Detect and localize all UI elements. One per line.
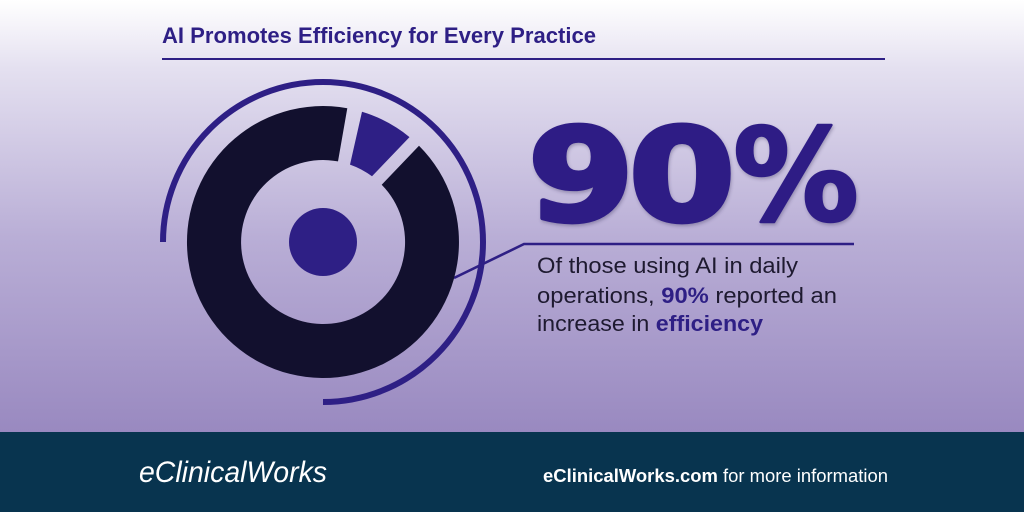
- big 90% figure: [528, 102, 859, 251]
- donut chart: [163, 82, 483, 402]
- big 90% figure: 9: [528, 102, 634, 251]
- leader line: [454, 244, 854, 278]
- big 90% figure: %: [733, 102, 859, 251]
- description text: [537, 253, 837, 336]
- footer link text: eClinicalWorks.com for more information: [543, 465, 888, 486]
- title underline: [162, 58, 885, 60]
- outer arc: [163, 82, 483, 402]
- title: AI Promotes Efficiency for Every Practice: [162, 23, 596, 48]
- logo wordmark: eClinicalWorks: [139, 456, 327, 489]
- description text: Of those using AI in daily: [537, 253, 798, 278]
- footer band: [0, 432, 1024, 512]
- description text: increase in efficiency: [537, 311, 764, 336]
- dark ring segment 90%: [187, 106, 459, 378]
- centre dot: [289, 208, 357, 276]
- description text: operations, 90% reported an: [537, 283, 837, 308]
- big 90% figure: 0: [629, 102, 735, 251]
- highlighted segment 10%: [350, 112, 410, 176]
